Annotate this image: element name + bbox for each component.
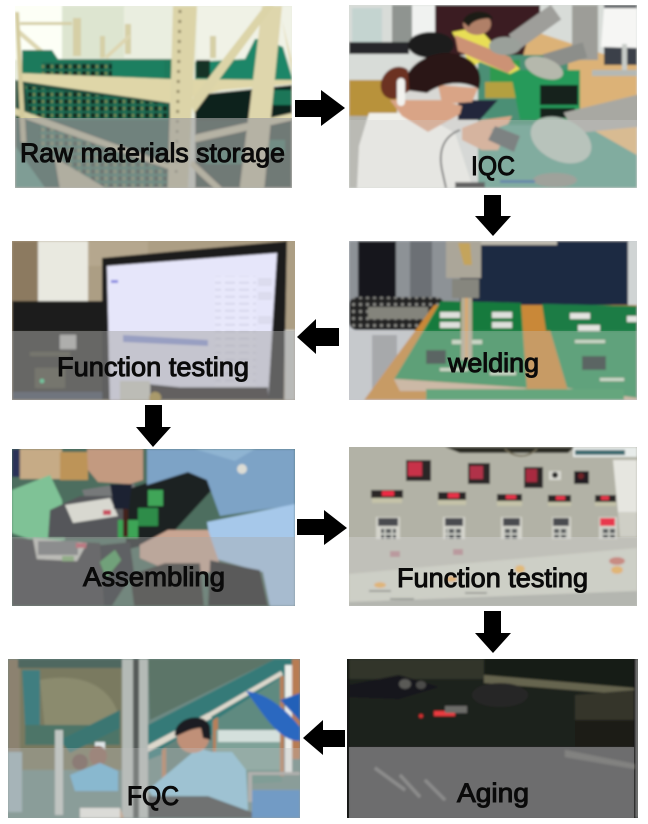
photo: hands assembling drives with a screwdriver xyxy=(5,445,300,610)
panel: raw materials storage xyxy=(15,6,292,188)
caption: Assembling: Assembling xyxy=(83,562,225,592)
caption: Function testing: Function testing xyxy=(397,563,588,593)
middle row displays xyxy=(371,490,616,506)
panel: function testing on computer xyxy=(12,241,295,400)
caption band xyxy=(349,537,637,606)
caption: IQC: IQC xyxy=(471,151,515,181)
arrow: aging to FQC xyxy=(303,720,345,755)
panel: assembling xyxy=(12,449,295,606)
panel: aging xyxy=(347,659,638,818)
arrow: function testing to aging xyxy=(475,611,511,653)
photo: inspector in blue coat at a production line xyxy=(0,652,305,824)
panel: welding xyxy=(349,241,637,400)
photo: test software on a monitor xyxy=(5,235,300,405)
caption band xyxy=(15,118,292,188)
top row meters xyxy=(406,460,589,488)
caption band xyxy=(8,748,300,818)
caption: welding: welding xyxy=(447,348,539,378)
arrow: IQC to welding xyxy=(475,195,511,236)
panel: function testing on control board xyxy=(349,447,637,606)
arrow: welding to function testing xyxy=(297,319,339,354)
bottom row keypads xyxy=(376,517,617,539)
caption: Raw materials storage: Raw materials storage xyxy=(20,138,285,168)
caption band xyxy=(12,537,295,606)
caption: Function testing: Function testing xyxy=(57,352,249,382)
caption band xyxy=(349,120,637,188)
arrow: assembling to function testing xyxy=(297,510,347,545)
caption band xyxy=(349,331,637,400)
photo: soldering head over green circuit boards xyxy=(340,235,645,405)
caption band xyxy=(12,331,295,400)
caption: FQC: FQC xyxy=(127,781,179,811)
arrow: function testing to assembling xyxy=(136,405,171,447)
caption band xyxy=(349,747,634,818)
photo: dim aging room with lit unit xyxy=(340,652,645,824)
photo: workers inspecting boards at a bench xyxy=(340,0,645,195)
photo: warehouse shelving with boards xyxy=(10,0,300,195)
panel: IQC xyxy=(349,5,637,188)
photo: test bench with meters and keypads xyxy=(340,440,645,610)
caption: Aging: Aging xyxy=(457,778,529,808)
panel: FQC xyxy=(8,659,300,818)
arrow: storage to IQC xyxy=(295,90,345,126)
